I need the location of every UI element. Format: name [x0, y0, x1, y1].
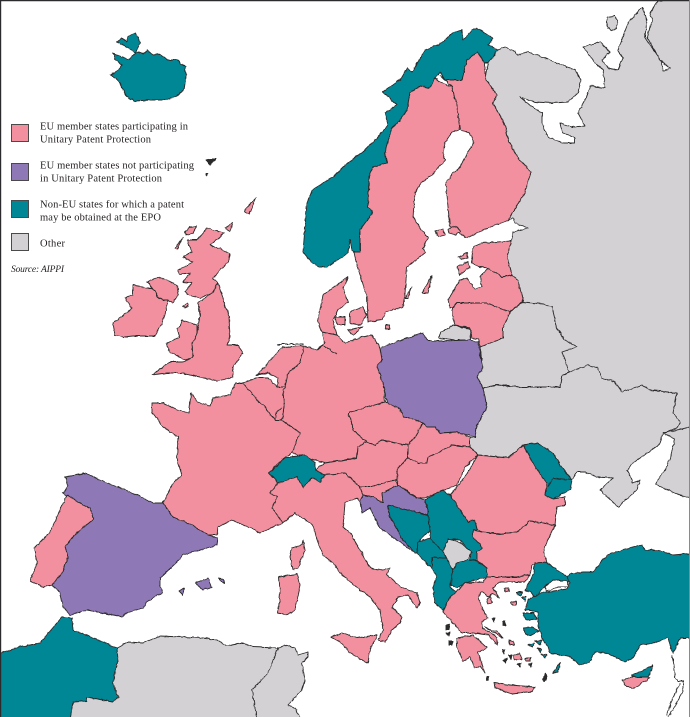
country: Montenegro: [417, 538, 446, 568]
Greek islands: [487, 587, 531, 661]
Peloponnese: [457, 635, 487, 673]
Elbe inlet: [322, 345, 337, 354]
country: Finland: [440, 52, 531, 238]
legend swatch: non-EU: [12, 200, 28, 218]
legend swatch: participating: [12, 124, 28, 142]
England: [152, 283, 243, 381]
country: Ukraine: [470, 365, 680, 507]
legend text: non-EU: Non-EU states for which a patent: [40, 200, 184, 210]
country: Denmark, Jutland: [318, 277, 348, 335]
Moldova southern boundary: [548, 478, 572, 487]
country: Albania: [432, 557, 456, 610]
country: Latvia: [448, 268, 523, 312]
Balearic islands: [179, 578, 224, 595]
source note: Source: AIPPI: [11, 265, 65, 275]
right edge line: [688, 0, 690, 717]
Corsica: [290, 540, 305, 570]
Sicily: [331, 633, 377, 663]
legend text: participating: Unitary Patent Protection: [40, 134, 152, 146]
Scottish islands: [175, 198, 256, 308]
country: Bulgaria: [473, 521, 555, 577]
legend text: participating: EU member states participating in: [40, 122, 189, 132]
Ireland: [113, 285, 168, 337]
Russia border to the Sea of Azov: [663, 426, 690, 433]
country: Croatia: [360, 485, 428, 553]
country: Spain: [52, 473, 218, 617]
Dutch coastal detail: [256, 344, 303, 420]
country: Czech Republic: [348, 402, 423, 445]
Ionian islands: [446, 618, 547, 682]
Iceland: [110, 33, 186, 101]
country: North Macedonia: [451, 560, 487, 588]
country: Austria: [315, 440, 408, 487]
Wales: [166, 320, 197, 360]
Turkish Thrace: [525, 562, 570, 597]
Faroe islands: [206, 159, 216, 176]
country: France: [152, 383, 300, 535]
country: Netherlands: [257, 346, 303, 387]
Estonian islands: [457, 253, 470, 275]
country: Slovenia: [360, 480, 398, 503]
legend swatch: not participating: [12, 164, 28, 180]
Sardinia: [278, 574, 300, 615]
country: Germany: [282, 332, 385, 463]
Crete: [494, 683, 535, 694]
country: Hungary: [397, 445, 478, 498]
Levant coastline: [666, 655, 683, 717]
Northern Cyprus: [631, 665, 653, 677]
country: Greece mainland: [443, 575, 530, 645]
country: Kosovo: [443, 539, 471, 570]
Northern Ireland: [147, 277, 178, 303]
legend text: non-EU: may be obtained at the EPO: [40, 212, 161, 224]
Kaliningrad: [439, 325, 471, 340]
Baltic islands: [385, 275, 432, 329]
Turkish islands: [517, 592, 561, 673]
country: Cyprus: [622, 677, 650, 688]
country: Switzerland: [269, 455, 325, 488]
country: Portugal: [30, 495, 94, 587]
country: Norway: [303, 28, 498, 267]
country: Italy: [270, 473, 420, 642]
country: Serbia: [425, 490, 483, 560]
legend text: other: Other: [40, 238, 66, 250]
countries: Algeria and Tunisia: [70, 636, 308, 717]
country: Slovakia: [408, 423, 470, 463]
Aland islands: [435, 226, 461, 237]
country: Sweden: [354, 78, 460, 322]
legend: [11, 122, 195, 275]
country: Turkey: [525, 545, 690, 665]
country: Moldova: [523, 443, 572, 499]
country: Morocco: [0, 617, 118, 717]
country: Romania: [450, 445, 565, 534]
country: Estonia: [472, 241, 512, 277]
legend text: not participating: in Unitary Patent Protection: [40, 174, 163, 184]
lake in northern Russia: [607, 16, 618, 31]
country: Lithuania: [452, 303, 510, 347]
country: Belgium and Luxembourg: [243, 378, 285, 420]
Sea of Marmara: [545, 580, 569, 591]
country: Russia: [485, 0, 690, 500]
country: Poland: [377, 333, 487, 437]
legend text: not participating: EU member states not participating: [40, 160, 195, 172]
country: Bosnia and Herzegovina: [388, 505, 430, 553]
Algeria Tunisia border: [252, 648, 278, 717]
legend swatch: other: [12, 234, 28, 250]
country: Belarus: [477, 302, 577, 388]
Scotland: [178, 228, 230, 298]
Euboea: [485, 627, 503, 638]
Danish islands: [335, 307, 367, 335]
